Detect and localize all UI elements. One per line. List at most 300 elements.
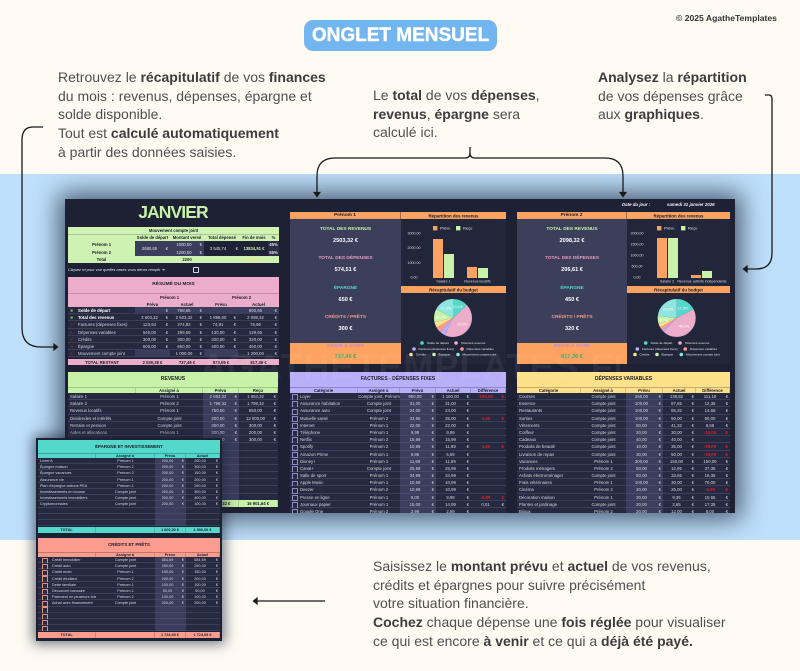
- summary rows: €: [234, 337, 236, 342]
- fixed expenses rows: Canal+: [300, 466, 314, 471]
- income rows: €: [274, 416, 276, 421]
- variable expenses rows: Plantes et jardinage: [519, 502, 557, 507]
- savings rows: €: [216, 496, 218, 500]
- text: current date: Date du jour :: [622, 202, 650, 207]
- summary rows: €: [234, 322, 236, 327]
- loans rows: €: [182, 595, 184, 599]
- person 2 charts: [627, 212, 730, 357]
- savings rows: 200,00: [162, 459, 173, 463]
- table: joint account movement: 2200: [182, 257, 192, 262]
- savings rows: €: [182, 465, 184, 469]
- summary person headers: [68, 293, 279, 307]
- income rows: Dividendes et intérêts: [70, 416, 111, 421]
- savings rows: Investissements en bourse: [40, 490, 85, 494]
- income rows: [68, 393, 278, 500]
- fixed expenses rows: 25,99: [410, 466, 420, 471]
- panel shadow: [65, 199, 735, 513]
- person 1 totals column: 737,46 €: [335, 354, 356, 360]
- fixed expenses rows: 950,00: [408, 394, 422, 399]
- fixed expenses rows: €: [467, 487, 469, 492]
- fixed expenses rows: 0,01: [481, 502, 490, 507]
- fixed expenses rows: €: [467, 437, 469, 442]
- person 2 totals column: TOTAL DES DÉPENSES: [545, 256, 599, 261]
- variable expenses rows: Compte joint: [591, 423, 616, 428]
- summary person headers: Actuel: [181, 302, 193, 307]
- income rows: €: [274, 430, 276, 435]
- text: current date: samedi 31 janvier 2026: [667, 202, 715, 207]
- fixed expenses rows: €: [432, 416, 434, 421]
- variable expenses rows: €: [692, 416, 694, 421]
- variable expenses rows: Prénom 2: [594, 466, 613, 471]
- variable expenses rows: €: [659, 473, 661, 478]
- summary rows: 2 098,32: [247, 315, 264, 320]
- variable expenses rows: €: [726, 480, 728, 485]
- variable expenses rows: 70,00: [705, 480, 715, 485]
- savings heading: [38, 440, 220, 453]
- table: joint account movement: Fin de mois: [242, 235, 266, 240]
- variable expenses rows: €: [726, 487, 728, 492]
- summary total row: TOTAL RESTANT: [85, 360, 119, 365]
- income rows: 750,00: [211, 408, 225, 413]
- variable expenses rows: €: [692, 394, 694, 399]
- summary rows: 129,65: [249, 330, 262, 335]
- variable expenses rows: 150,00: [670, 459, 683, 464]
- fixed expenses rows: 31,00: [410, 401, 420, 406]
- income total row: 16 901,64 €: [247, 501, 269, 506]
- arrow: charts analysis: [742, 94, 773, 274]
- variable expenses rows: Vacances: [519, 459, 538, 464]
- variable expenses rows: €: [659, 437, 661, 442]
- loans rows: €: [182, 564, 184, 568]
- savings rows: 200,00: [162, 484, 173, 488]
- text block: monthly recap: solde disponible.: [58, 106, 162, 122]
- person 1 charts: Reçu: [463, 226, 472, 231]
- fixed expenses column headers: Actuel: [447, 388, 459, 393]
- person 1 charts: Factures (dépenses fixes): [418, 347, 454, 351]
- panel: savings and loans: [36, 438, 222, 641]
- summary rows: 758,65: [177, 308, 191, 313]
- title pill: ONGLET MENSUEL: [312, 25, 489, 46]
- loans rows: 100,00: [162, 583, 173, 587]
- loans rows: €: [182, 570, 184, 574]
- savings rows: €: [182, 496, 184, 500]
- income rows: Prénom 1: [160, 430, 179, 435]
- variable expenses rows: €: [659, 452, 661, 456]
- fixed expenses rows: €: [432, 394, 434, 399]
- variable expenses rows: 50,00: [636, 423, 647, 428]
- person 2 charts: 17,3%: [678, 306, 689, 310]
- savings rows: 300,00: [194, 490, 206, 494]
- loans rows: [38, 557, 220, 631]
- summary rows: 74,91: [213, 322, 223, 327]
- person 2 totals column: 450 €: [565, 296, 579, 302]
- summary rows: Solde de départ: [78, 308, 110, 313]
- fixed expenses rows: €: [432, 466, 434, 471]
- person 1 charts: Dépenses variables: [466, 347, 494, 351]
- savings rows: €: [182, 490, 184, 494]
- fixed expenses column headers: Catégorie: [314, 388, 333, 393]
- variable expenses rows: 20,00: [636, 495, 647, 500]
- table: joint account movement: Solde de départ: [137, 235, 168, 240]
- summary rows: 2 503,32: [176, 315, 192, 320]
- person 2 charts: Solde de départ: [650, 341, 672, 345]
- fixed expenses rows: 15,99: [445, 437, 456, 442]
- variable expenses rows: 138,82: [670, 394, 683, 399]
- text block: totals: revenus, épargne sera: [373, 106, 520, 122]
- variable expenses rows: 50,00: [705, 416, 715, 421]
- person 2 charts: Total des revenus: [685, 341, 710, 345]
- fixed expenses rows: 15,00: [410, 502, 420, 507]
- summary rows: €: [166, 337, 168, 342]
- summary rows: 890,65: [249, 308, 262, 313]
- fixed expenses rows: 9,00: [411, 495, 419, 500]
- blue background band: [0, 174, 800, 540]
- text block: entering amounts: Cochez chaque dépense une fois réglée pour visualiser: [373, 614, 726, 630]
- person 1 charts: Total des revenus: [461, 341, 486, 345]
- person 1 charts: Solde de départ: [427, 341, 449, 345]
- person 1 charts: Crédits: [416, 353, 426, 357]
- fixed expenses rows: €: [467, 459, 469, 464]
- savings rows: Compte joint: [115, 502, 136, 506]
- fixed expenses rows: Mutuelle santé: [300, 416, 328, 421]
- loans rows: €: [182, 583, 184, 587]
- person 2 totals column: ÉPARGNE: [560, 286, 584, 291]
- loans rows: Découvert bancaire: [52, 589, 85, 593]
- fixed expenses rows: Assurance auto: [300, 408, 330, 413]
- person 2 totals column: 817,36 €: [561, 354, 583, 360]
- loans heading: CRÉDITS ET PRÊTS: [108, 542, 150, 547]
- summary rows: Épargne: [78, 344, 94, 349]
- summary total row: 2 039,38 €: [143, 360, 162, 365]
- fixed expenses rows: 34,99: [410, 473, 420, 478]
- variable expenses rows: €: [692, 495, 694, 500]
- income heading: REVENUS: [161, 376, 185, 382]
- income rows: €: [235, 423, 237, 428]
- income rows: Compte joint: [157, 416, 182, 421]
- savings rows: €: [216, 478, 218, 482]
- fixed expenses rows: €: [432, 444, 434, 449]
- person 1 charts: Récapitulatif du budget: [429, 288, 478, 293]
- loans rows: €: [216, 583, 218, 587]
- loans rows: €: [216, 601, 218, 605]
- income rows: 1 653,32: [247, 394, 264, 399]
- savings rows: Cryptomonnaies: [40, 502, 68, 506]
- variable expenses rows: Frais vétérinaires: [519, 480, 552, 485]
- person 1 totals column: RESTE À VIVRE: [327, 344, 364, 349]
- variable expenses rows: 250,00: [635, 394, 648, 399]
- variable expenses rows: Courses: [519, 394, 535, 399]
- savings rows: 200,00: [194, 459, 206, 463]
- loans rows: 250,00: [194, 564, 206, 568]
- variable expenses rows: -10,00: [704, 430, 716, 435]
- variable expenses rows: 100,00: [635, 408, 648, 413]
- savings rows: 100,00: [194, 502, 206, 506]
- fixed expenses rows: €: [432, 480, 434, 485]
- fixed expenses rows: 9,99: [446, 430, 455, 435]
- variable expenses rows: Essence: [519, 401, 535, 406]
- variable expenses rows: €: [726, 502, 728, 507]
- loans rows: €: [182, 601, 184, 605]
- variable expenses column headers: Différence: [702, 388, 723, 393]
- fixed expenses rows: 25,99: [445, 466, 456, 471]
- person 2 charts: Prévu: [664, 226, 674, 231]
- fixed expenses heading: [290, 372, 506, 387]
- arrow: recap to summary: [21, 126, 58, 352]
- variable expenses rows: Prénom 2: [594, 487, 613, 492]
- variable expenses rows: €: [726, 423, 728, 428]
- income rows: 2 653,32: [210, 394, 226, 399]
- variable expenses rows: 50,00: [636, 473, 647, 478]
- variable expenses rows: €: [726, 452, 728, 456]
- income heading: [68, 372, 278, 387]
- summary rows: ■: [70, 330, 73, 335]
- variable expenses rows: 30,00: [671, 430, 682, 435]
- variable expenses rows: Compte joint: [591, 473, 616, 478]
- variable expenses rows: 17,35: [705, 502, 715, 507]
- variable expenses rows: €: [659, 495, 661, 500]
- variable expenses rows: [517, 393, 730, 513]
- variable expenses rows: €: [692, 444, 694, 449]
- summary rows: Crédits: [78, 337, 92, 342]
- variable expenses rows: €: [692, 408, 694, 413]
- savings rows: Compte joint: [115, 490, 136, 494]
- summary rows: €: [275, 337, 277, 342]
- loans rows: Paiement en plusieurs fois: [52, 595, 96, 599]
- summary rows: €: [166, 344, 168, 349]
- person 2 charts: Salaire 2: [660, 280, 674, 284]
- fixed expenses rows: €: [502, 416, 504, 421]
- table: joint account movement: €: [200, 242, 202, 247]
- savings rows: Prénom 1: [117, 478, 134, 482]
- savings total row: 1 900,00 €: [194, 528, 211, 532]
- savings total row: 1 600,00 €: [161, 528, 179, 532]
- text block: entering amounts: votre situation financière.: [373, 595, 529, 611]
- summary rows: €: [275, 330, 277, 335]
- person 1 charts: 1000,00: [408, 261, 420, 265]
- table: joint account movement: [68, 227, 279, 263]
- variable expenses rows: 8,68: [706, 423, 714, 428]
- summary rows: Mouvement compte joint: [78, 351, 125, 356]
- loans rows: 150,00: [194, 570, 206, 574]
- fixed expenses rows: Compte joint: [367, 466, 391, 471]
- summary rows: 540,00: [143, 330, 156, 335]
- person 1 charts: 3000,00: [408, 232, 420, 236]
- fixed expenses rows: 6,99: [446, 452, 455, 456]
- summary rows: 400,00: [211, 344, 225, 349]
- variable expenses rows: Restaurants: [519, 408, 542, 413]
- loans rows: 50,00: [163, 589, 172, 593]
- person 1 header: Prénom 1: [334, 213, 356, 218]
- fixed expenses rows: -0,99: [481, 495, 490, 500]
- summary rows: 1 200,00: [247, 351, 264, 356]
- fixed expenses rows: Prénom 1: [370, 452, 388, 456]
- summary rows: ■: [70, 315, 73, 320]
- summary rows: €: [200, 308, 202, 313]
- variable expenses rows: Cadeaux: [519, 437, 536, 442]
- income rows: 300,00: [249, 423, 262, 428]
- fixed expenses rows: Prénom 1: [370, 502, 388, 507]
- summary heading: [68, 277, 279, 293]
- savings rows: Épargne maison: [40, 465, 68, 469]
- fixed expenses rows: €: [432, 502, 434, 507]
- loans rows: €: [216, 589, 218, 593]
- fixed expenses rows: €: [467, 401, 469, 406]
- fixed expenses rows: [290, 393, 506, 513]
- person 2 totals column: 206,61 €: [561, 266, 583, 272]
- fixed expenses rows: €: [467, 430, 469, 435]
- variable expenses rows: Sorties: [519, 416, 532, 421]
- loans rows: €: [216, 564, 218, 568]
- loans rows: €: [216, 570, 218, 574]
- fixed expenses rows: 11,99: [445, 459, 456, 464]
- variable expenses rows: 10,65: [705, 495, 715, 500]
- fixed expenses rows: 34,99: [445, 473, 456, 478]
- variable expenses rows: 150,00: [703, 459, 717, 464]
- person 2 charts: Reçu: [688, 226, 697, 231]
- table: joint account movement: 45%: [269, 242, 278, 247]
- variable expenses column headers: Actuel: [673, 388, 685, 393]
- person 1 charts: Mouvement compte joint: [462, 353, 496, 357]
- variable expenses rows: €: [659, 444, 661, 449]
- variable expenses rows: €: [692, 480, 694, 485]
- income rows: Compte joint: [157, 423, 182, 428]
- variable expenses rows: 50,00: [636, 466, 647, 471]
- income rows: €: [274, 423, 276, 428]
- person 2 totals column: RESTE À VIVRE: [554, 344, 590, 349]
- text block: charts: de vos dépenses grâce: [598, 88, 743, 104]
- summary rows: €: [200, 330, 202, 335]
- income rows: 200,00: [249, 430, 262, 435]
- variable expenses rows: Compte joint: [591, 430, 616, 435]
- variable expenses rows: €: [692, 502, 694, 507]
- table: joint account movement: Prénom 2: [92, 250, 111, 254]
- loans rows: 100,00: [194, 595, 206, 599]
- loans rows: 250,00: [162, 564, 173, 568]
- summary rows: ■: [70, 337, 73, 342]
- savings total row: [38, 527, 220, 533]
- income rows: 650,00: [249, 408, 262, 413]
- table: joint account movement: Total dépensé: [208, 235, 236, 240]
- table: joint account movement: 13834,91 €: [244, 257, 264, 262]
- variable expenses rows: 40,00: [671, 437, 682, 442]
- fixed expenses rows: Journaux papier: [300, 502, 331, 507]
- fixed expenses column headers: Différence: [478, 388, 498, 393]
- fixed expenses rows: €: [432, 473, 434, 478]
- text: current date: [622, 202, 715, 207]
- loans rows: Achat avec financement: [52, 601, 93, 605]
- variable expenses rows: Compte joint: [591, 437, 616, 442]
- loans rows: Crédit auto: [52, 564, 71, 568]
- summary rows: €: [200, 344, 202, 349]
- variable expenses rows: €: [659, 487, 661, 492]
- variable expenses rows: €: [726, 394, 728, 399]
- variable expenses rows: €: [659, 416, 661, 421]
- loans rows: Compte joint: [115, 558, 136, 562]
- table: joint account movement: Prénom 1: [92, 242, 111, 247]
- fixed expenses rows: Prénom 1: [370, 430, 388, 435]
- person 1 charts: 0,00: [410, 276, 418, 280]
- summary rows: 600,00: [143, 344, 156, 349]
- summary rows: 450,00: [249, 344, 262, 349]
- variable expenses rows: €: [726, 495, 728, 500]
- panel: person 1: [290, 212, 506, 364]
- fixed expenses rows: Prénom 2: [370, 416, 388, 421]
- person 2 totals column: [517, 219, 627, 364]
- loans rows: 150,00: [162, 570, 173, 574]
- fixed expenses rows: 11,99: [445, 444, 456, 449]
- person 1 charts: 2000,00: [408, 246, 420, 250]
- arrow: entries to savings panel: [252, 596, 325, 606]
- variable expenses rows: 30,00: [671, 480, 682, 485]
- person 2 totals column: 2098,32 €: [560, 238, 584, 244]
- variable expenses rows: Compte joint: [591, 416, 616, 421]
- summary rows: €: [234, 315, 236, 320]
- variable expenses rows: €: [692, 466, 694, 471]
- fixed expenses rows: 10,99: [445, 480, 456, 485]
- person 1 totals column: 574,51 €: [335, 266, 356, 272]
- copyright notice: © 2025 AgatheTemplates: [676, 13, 777, 23]
- person 2 charts: Répartition des revenus: [653, 214, 704, 219]
- loans rows: Compte joint: [115, 601, 136, 605]
- variable expenses rows: 14,68: [705, 408, 715, 413]
- person 1 totals column: 650 €: [338, 296, 352, 302]
- person 2 charts: Récapitulatif du budget: [654, 288, 703, 293]
- person 1 totals column: TOTAL DES DÉPENSES: [318, 256, 373, 261]
- text block: entering amounts: crédits et épargnes pour suivre précisément: [373, 577, 645, 593]
- income rows: Prénom 1: [160, 408, 179, 413]
- variable expenses rows: €: [659, 459, 661, 464]
- summary rows: 274,82: [177, 322, 191, 327]
- table: joint account movement: 1000,00: [176, 242, 192, 247]
- savings rows: Épargne vacances: [40, 471, 71, 475]
- fixed expenses rows: Apple Music: [300, 480, 323, 485]
- text block: monthly recap: du mois : revenus, dépenses, épargne et: [58, 88, 312, 104]
- summary rows: ■: [70, 308, 73, 313]
- variable expenses column headers: Catégorie: [539, 388, 558, 393]
- text block: entering amounts: Saisissez le montant prévu et actuel de vos revenus,: [373, 558, 711, 574]
- fixed expenses rows: -150,00: [478, 394, 493, 399]
- variable expenses rows: Compte joint: [591, 394, 616, 399]
- savings rows: 300,00: [194, 465, 206, 469]
- savings rows: €: [216, 490, 218, 494]
- variable expenses rows: 2,65: [672, 502, 681, 507]
- person 2 charts: Crédits: [640, 353, 650, 357]
- table: joint account movement: 3 545,74: [210, 246, 226, 251]
- variable expenses rows: 111,18: [704, 394, 716, 399]
- person 2 totals column: TOTAL DES REVENUS: [546, 227, 598, 232]
- variable expenses rows: €: [726, 459, 728, 464]
- panel: monthly spreadsheet: [65, 199, 735, 513]
- savings rows: €: [216, 484, 218, 488]
- summary rows: €: [166, 322, 168, 327]
- fixed expenses rows: €: [432, 487, 434, 492]
- fixed expenses rows: €: [467, 423, 469, 428]
- person 1 totals column: CRÉDITS / PRÊTS: [325, 315, 366, 320]
- fixed expenses rows: €: [432, 459, 434, 464]
- income rows: 12 000,00: [246, 416, 265, 421]
- fixed expenses rows: -1,05: [481, 416, 490, 421]
- icon: checkbox: [193, 267, 199, 273]
- summary rows: €: [275, 308, 277, 313]
- loans rows: 200,00: [162, 577, 173, 581]
- savings rows: Assurance vie: [40, 478, 64, 482]
- person 1 charts: 13,1%: [453, 305, 464, 309]
- summary rows: €: [234, 330, 236, 335]
- variable expenses rows: 30,00: [636, 452, 647, 456]
- person 2 charts: 1000,00: [630, 254, 644, 258]
- income total row: 6 901,32 €: [211, 501, 230, 506]
- variable expenses rows: Livraison de repas: [519, 452, 554, 456]
